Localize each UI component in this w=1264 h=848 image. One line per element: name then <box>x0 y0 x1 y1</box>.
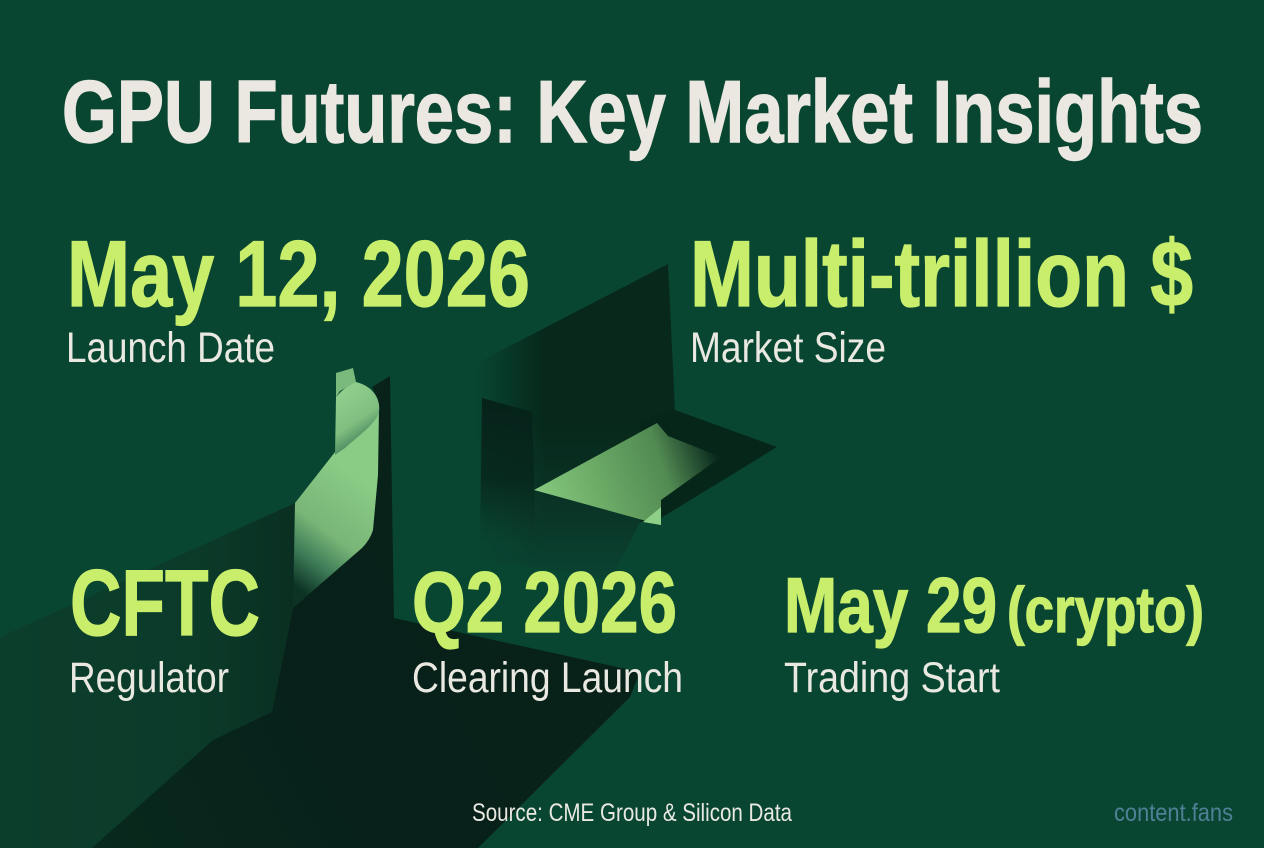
shape: dark inner block <box>480 398 536 545</box>
shape: dark arrow tip <box>640 410 777 522</box>
brand mark: content.fans <box>1114 799 1233 827</box>
stat: trading start <box>784 561 1204 702</box>
shadow: dark central diagonal <box>92 376 640 848</box>
shadow: soft faded block behind arrow <box>494 264 675 556</box>
stat: market size: Market Size <box>690 324 886 372</box>
stat: regulator: Regulator <box>69 654 229 702</box>
stat: clearing launch: Clearing Launch <box>412 654 683 702</box>
stat: trading start: (crypto) <box>1007 574 1204 646</box>
shadow band: left diagonal <box>0 452 362 848</box>
stat: regulator <box>69 550 260 702</box>
stat: clearing launch <box>412 555 683 702</box>
stat: clearing launch: Q2 2026 <box>412 555 677 651</box>
source note: Source: CME Group & Silicon Data <box>472 799 792 827</box>
stat: market size <box>690 221 1193 372</box>
stat: launch date <box>66 221 530 372</box>
stat: launch date: May 12, 2026 <box>67 221 530 326</box>
stat: trading start: Trading Start <box>784 654 1000 702</box>
stat: regulator: CFTC <box>70 550 260 655</box>
shape: ribbon fold <box>293 368 379 608</box>
stat: launch date: Launch Date <box>66 324 275 372</box>
shape: light arrow plane <box>534 423 721 525</box>
stat: trading start: May 29 <box>784 561 997 649</box>
